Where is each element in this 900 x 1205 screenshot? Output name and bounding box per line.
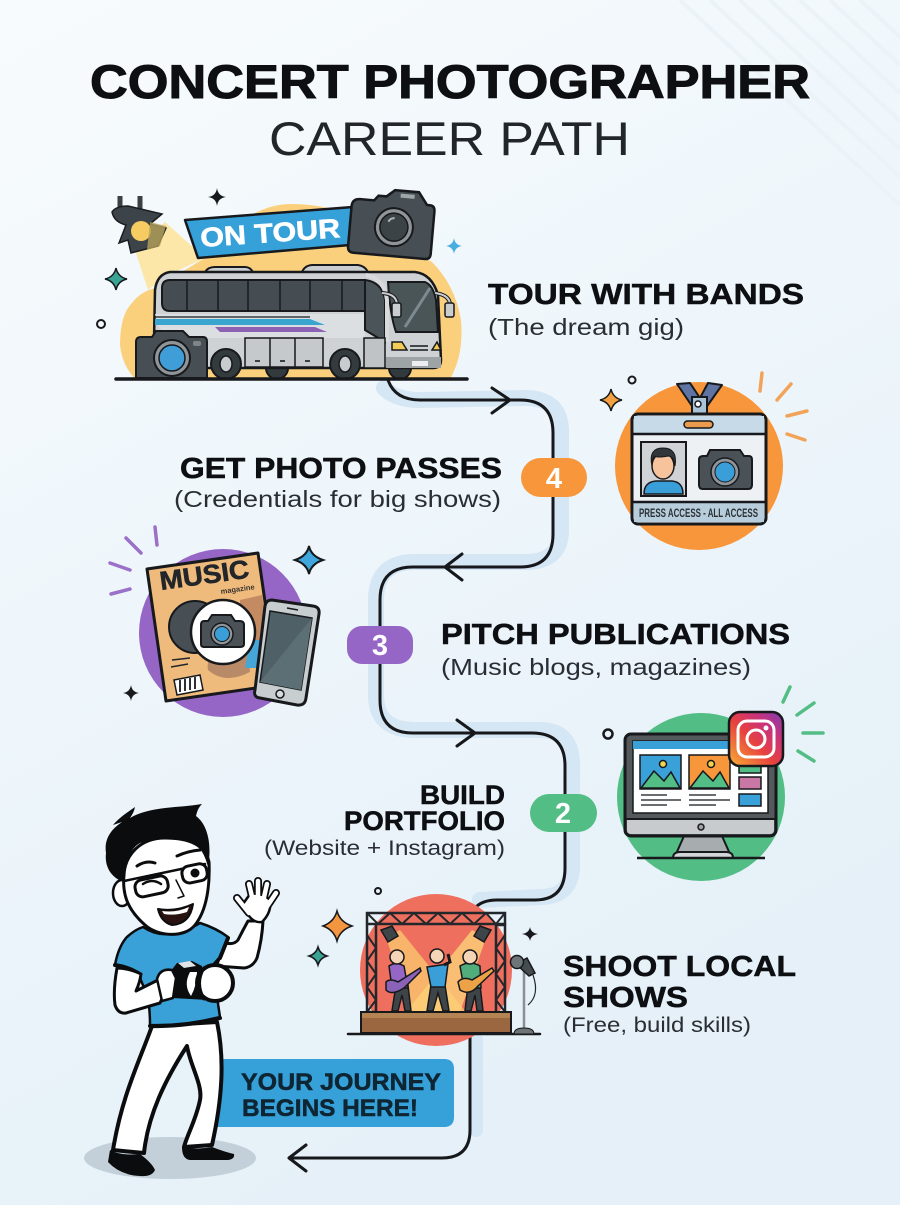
illustration: stage with band <box>309 888 540 1046</box>
phone <box>255 600 319 705</box>
heading: pitch publications: (Music blogs, magazines) <box>441 654 751 680</box>
illustration: portfolio monitor <box>604 687 823 881</box>
front <box>392 342 407 350</box>
step badge 3 <box>347 626 413 664</box>
monitor <box>676 836 730 854</box>
illustration: magazine and phone: magazine <box>220 582 255 596</box>
step badge 2: 2 <box>555 798 571 830</box>
heading: get photo passes: (Credentials for big shows) <box>174 486 501 512</box>
magazine <box>147 553 277 701</box>
illustration: tour bus <box>97 186 467 379</box>
card <box>632 414 766 524</box>
rays <box>760 373 807 440</box>
shadow <box>84 1137 256 1179</box>
title: CONCERT PHOTOGRAPHER <box>90 55 810 108</box>
heading: pitch publications: PITCH PUBLICATIONS <box>441 619 790 651</box>
camera <box>157 961 233 1001</box>
illustration: press pass <box>600 373 807 550</box>
illustration: magazine and phone: MUSIC <box>158 554 251 596</box>
illustration: waving photographer <box>84 804 276 1179</box>
heading: tour with bands: (The dream gig) <box>488 314 684 340</box>
heading: shoot local shows: SHOOT LOCAL <box>563 951 796 983</box>
light beams <box>386 930 466 1012</box>
heading: shoot local shows: (Free, build skills) <box>563 1014 751 1037</box>
lower panels <box>245 338 323 367</box>
shirt <box>115 923 228 1025</box>
portrait <box>641 442 686 496</box>
bus wheels under <box>266 357 288 379</box>
on tour banner: ON TOUR <box>199 213 341 253</box>
on tour banner <box>185 207 353 258</box>
camera circle <box>191 600 255 664</box>
instagram icon <box>729 712 783 766</box>
stage platform <box>361 1012 511 1033</box>
lanyard <box>677 383 722 412</box>
mouth <box>158 904 193 925</box>
front camera <box>136 331 207 378</box>
callout: your journey begins here <box>214 1059 454 1127</box>
roof units <box>205 265 368 272</box>
step badge 4: 4 <box>546 463 562 495</box>
right arm <box>216 921 263 968</box>
heading: build portfolio: PORTFOLIO <box>344 806 505 836</box>
heading: get photo passes: GET PHOTO PASSES <box>180 453 502 485</box>
sparkles <box>208 188 226 206</box>
truss <box>367 913 505 1012</box>
title <box>90 55 810 165</box>
windows <box>162 280 365 311</box>
top camera <box>348 186 436 259</box>
heading: shoot local shows: SHOWS <box>563 982 688 1014</box>
yellow blob <box>120 204 462 379</box>
band <box>386 949 494 1011</box>
step badge 3: 3 <box>372 630 388 662</box>
bus body <box>154 272 441 368</box>
hair <box>106 804 210 882</box>
heading: build portfolio: BUILD <box>420 780 505 810</box>
spotlight <box>112 196 205 290</box>
callout: your journey begins here: BEGINS HERE! <box>242 1095 418 1122</box>
title: CAREER PATH <box>269 112 630 165</box>
glasses <box>124 864 205 881</box>
waving hand <box>237 881 276 922</box>
ground line <box>116 377 467 381</box>
heading: build portfolio: (Website + Instagram) <box>264 837 505 860</box>
sparkles <box>323 911 352 941</box>
heading: get photo passes <box>174 453 502 512</box>
head <box>106 804 210 934</box>
callout: your journey begins here: YOUR JOURNEY <box>241 1069 441 1096</box>
mirrors <box>382 293 397 305</box>
step badge 2 <box>530 794 597 832</box>
pants <box>113 1022 222 1153</box>
heading: pitch publications <box>441 619 790 680</box>
rays <box>783 687 823 761</box>
shoes <box>108 1150 155 1176</box>
heading: build portfolio <box>264 780 505 860</box>
career path line <box>289 380 572 1171</box>
microphone <box>510 956 536 1034</box>
illustration: magazine and phone <box>110 527 323 717</box>
left arm <box>114 968 166 1013</box>
press text: PRESS ACCESS - ALL ACCESS <box>639 508 758 520</box>
heading: tour with bands: TOUR WITH BANDS <box>488 279 804 311</box>
badge camera <box>699 450 752 489</box>
rays <box>110 527 157 594</box>
heading: tour with bands <box>488 279 804 340</box>
stripes <box>155 319 325 325</box>
step badge 4 <box>521 458 587 497</box>
website images <box>640 755 730 789</box>
heading: shoot local shows <box>563 951 796 1037</box>
wheels <box>211 349 360 379</box>
